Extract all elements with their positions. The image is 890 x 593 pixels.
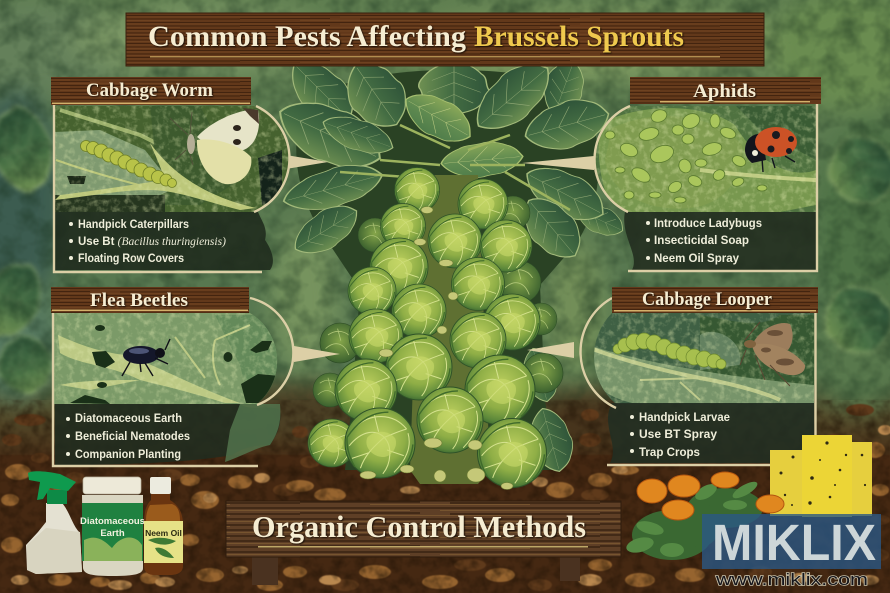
icon: diatomaceous earth jar <box>80 477 145 576</box>
soil clods <box>0 400 890 593</box>
pointer: flea beetles <box>294 346 340 362</box>
text box: cabbage looper controls <box>608 403 814 463</box>
text box: flea beetles controls <box>55 404 280 465</box>
pointer: cabbage looper <box>527 342 574 358</box>
header: Flea Beetles <box>51 287 249 313</box>
frame: aphids <box>595 104 817 271</box>
icon: diatomaceous earth jar: Earth <box>100 528 125 539</box>
photo: looper on leaf <box>594 313 814 404</box>
sprout buds back row <box>313 196 563 407</box>
header: Cabbage Looper: Cabbage Looper <box>642 289 773 310</box>
aphid cluster <box>605 108 767 203</box>
leaf holes <box>70 325 280 404</box>
icon: yellow sticky traps <box>770 435 872 517</box>
header: Cabbage Looper <box>612 287 818 313</box>
leaf stems <box>340 125 570 210</box>
pointer: cabbage worm <box>286 155 328 169</box>
text box: cabbage worm controls: Floating Row Covers <box>78 253 184 265</box>
text box: cabbage looper controls: Handpick Larvae <box>639 412 730 424</box>
text box: cabbage worm controls: Use Bt (Bacillus thuringiensis) <box>78 236 226 248</box>
frame: flea beetles <box>53 298 293 466</box>
photo: aphids on leaf <box>590 105 818 215</box>
text box: flea beetles controls: Diatomaceous Earth <box>75 413 182 425</box>
sign: organic control methods <box>226 501 621 585</box>
header: Flea Beetles: Flea Beetles <box>90 290 188 311</box>
icon: neem oil bottle <box>144 477 183 575</box>
photo: beetle on chewed leaf <box>54 313 278 404</box>
text box: cabbage worm controls: Handpick Caterpillars <box>78 219 189 231</box>
text box: aphids controls: Insecticidal Soap <box>654 235 749 247</box>
icon: diatomaceous earth jar: Diatomaceous <box>80 516 145 527</box>
outer leaves <box>268 49 628 270</box>
panel: cabbage worm <box>51 77 328 272</box>
marigold blooms <box>637 472 784 520</box>
frame: cabbage looper <box>581 298 816 465</box>
title banner <box>126 13 764 66</box>
text box: aphids controls: Introduce Ladybugs <box>654 218 762 230</box>
icon: ladybug <box>745 127 797 172</box>
header: Aphids <box>630 77 821 104</box>
header: Cabbage Worm <box>51 77 251 105</box>
text box: flea beetles controls: Companion Planting <box>75 449 181 461</box>
icon: white butterfly <box>170 108 259 184</box>
text box: flea beetles controls: Beneficial Nematodes <box>75 431 190 443</box>
panel: aphids <box>522 77 821 271</box>
frame: cabbage worm <box>54 105 289 272</box>
sprout buds front <box>308 168 546 488</box>
brussels sprouts plant <box>268 49 628 489</box>
header: Aphids: Aphids <box>693 81 756 102</box>
icon: spray bottle <box>26 471 82 574</box>
panel: flea beetles <box>51 287 340 466</box>
header: Cabbage Worm: Cabbage Worm <box>86 81 214 101</box>
small yellow nubs <box>360 206 513 490</box>
marigold foliage <box>625 479 763 560</box>
dark canopy mass <box>296 70 598 470</box>
icon: brown moth <box>740 322 805 386</box>
marigold plants <box>625 472 784 560</box>
sign: organic control methods: Organic Control Methods <box>252 509 586 544</box>
text box: cabbage looper controls: Use BT Spray <box>639 429 718 441</box>
title banner: Common Pests Affecting <box>148 20 466 53</box>
text box: cabbage worm controls <box>55 212 273 270</box>
panel: cabbage looper <box>527 287 818 465</box>
text box: aphids controls: Neem Oil Spray <box>654 253 740 265</box>
pointer: aphids <box>522 156 594 170</box>
icon: black beetle <box>122 339 170 376</box>
watermark: website url: www.miklix.com <box>715 570 868 589</box>
central stalk <box>410 175 490 484</box>
text box: cabbage looper controls: Trap Crops <box>639 447 700 459</box>
icon: caterpillar <box>80 140 176 188</box>
icon: neem oil bottle: Neem Oil <box>145 528 182 538</box>
watermark: MIKLIX logo: MIKLIX <box>712 514 876 571</box>
photo: cabbage worm on leaf <box>55 105 290 215</box>
text box: aphids controls <box>624 212 816 270</box>
icon: green looper caterpillar <box>613 333 726 369</box>
lower dark leaves <box>523 403 579 477</box>
title banner: Brussels Sprouts <box>474 20 684 53</box>
